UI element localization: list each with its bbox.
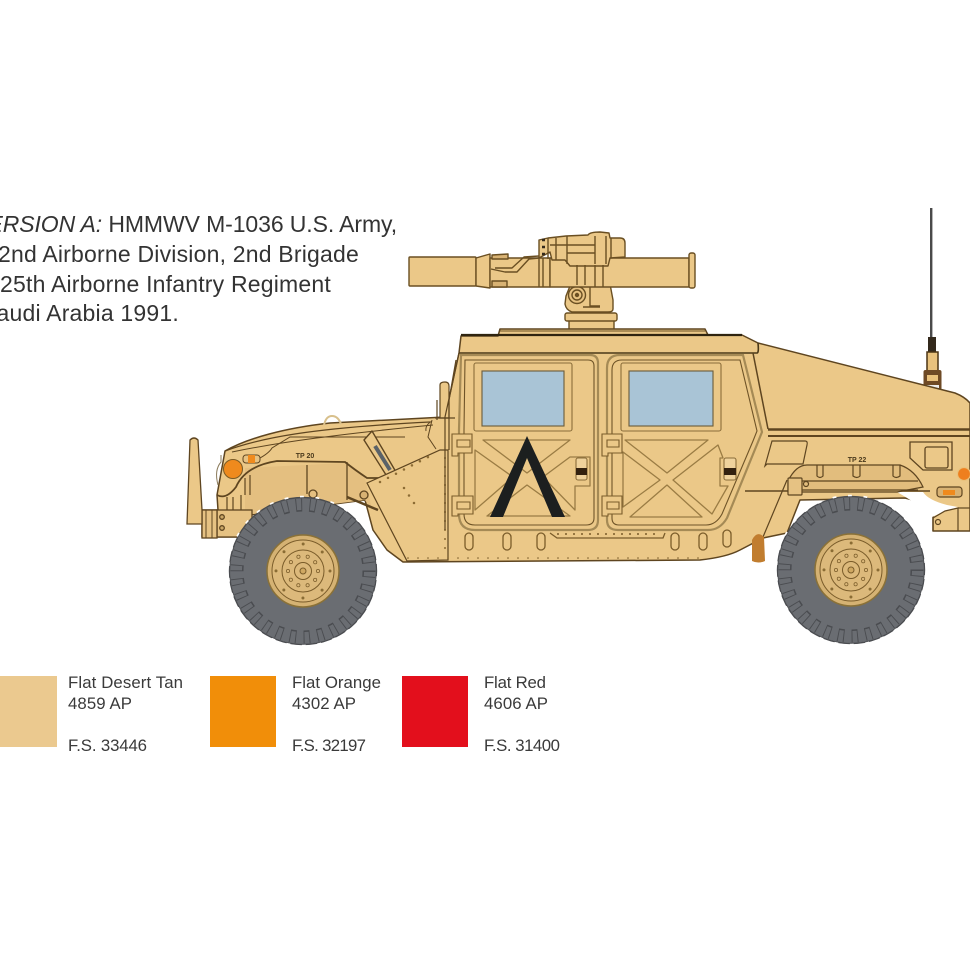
front bumper (202, 510, 252, 538)
mirror bracket (435, 382, 455, 420)
tow ring (324, 416, 341, 425)
rear fender arch (763, 465, 923, 537)
colour key: Flat Orange: F.S. 32197 (292, 736, 366, 755)
front grille slats (227, 475, 250, 510)
colour key: Flat Desert Tan: F.S. 33446 (68, 736, 147, 755)
colour key: Flat Orange: 4302 AP (292, 694, 356, 713)
launcher pedestal (565, 284, 617, 330)
colour key: Flat Desert Tan: Flat Desert Tan (68, 673, 183, 692)
roof (459, 331, 758, 353)
rear bed lines (745, 353, 970, 491)
launcher sight (539, 232, 625, 287)
colour key: Flat Desert Tan: 4859 AP (68, 694, 132, 713)
version caption text block (0, 211, 397, 326)
rear door (602, 355, 762, 530)
brush guard post (187, 438, 202, 524)
rear door hinges (602, 434, 622, 516)
colour key: Flat Orange: Flat Orange (292, 673, 381, 692)
lower sill rivets (408, 557, 700, 559)
windshield post (445, 353, 459, 530)
TOW missile launcher (409, 232, 695, 330)
colour key: Flat Red: Flat Red (484, 673, 546, 692)
launcher tube (409, 253, 695, 288)
hull silhouette (202, 329, 970, 562)
riveted cowl panel (367, 420, 448, 561)
colour key: Flat Red: 4606 AP (484, 694, 548, 713)
vehicle body (187, 329, 970, 562)
front wheel (228, 496, 378, 646)
front marker light (243, 455, 260, 463)
front door cross panels (475, 440, 590, 516)
colour key: Flat Orange (210, 673, 381, 755)
colour key: Flat Red: F.S. 31400 (484, 736, 560, 755)
front door handle (576, 458, 587, 480)
marking: TP 20: TP 20 (296, 453, 314, 460)
rear door window (629, 371, 713, 426)
rear lights and tow bracket (933, 468, 970, 531)
rear door handle (724, 458, 736, 480)
rear wheel (776, 496, 926, 644)
national chevron marking (490, 436, 565, 517)
antenna (924, 208, 942, 390)
windshield wiper arm (364, 431, 396, 478)
marking: TP 22: TP 22 (848, 457, 866, 464)
front door hinges (452, 434, 473, 516)
colour key: Flat Red (402, 673, 560, 755)
front door window (482, 371, 564, 426)
sill vents and step (465, 530, 731, 550)
front door (452, 355, 598, 530)
rear mud flap (752, 534, 765, 562)
headlight (217, 455, 242, 485)
rear bumper gap (897, 492, 958, 517)
rear door cross panels (623, 440, 728, 517)
front door window frame (474, 363, 572, 431)
front fender and hood detail (217, 422, 433, 515)
rear door window frame (621, 363, 721, 431)
colour key: Flat Desert Tan (0, 673, 183, 755)
